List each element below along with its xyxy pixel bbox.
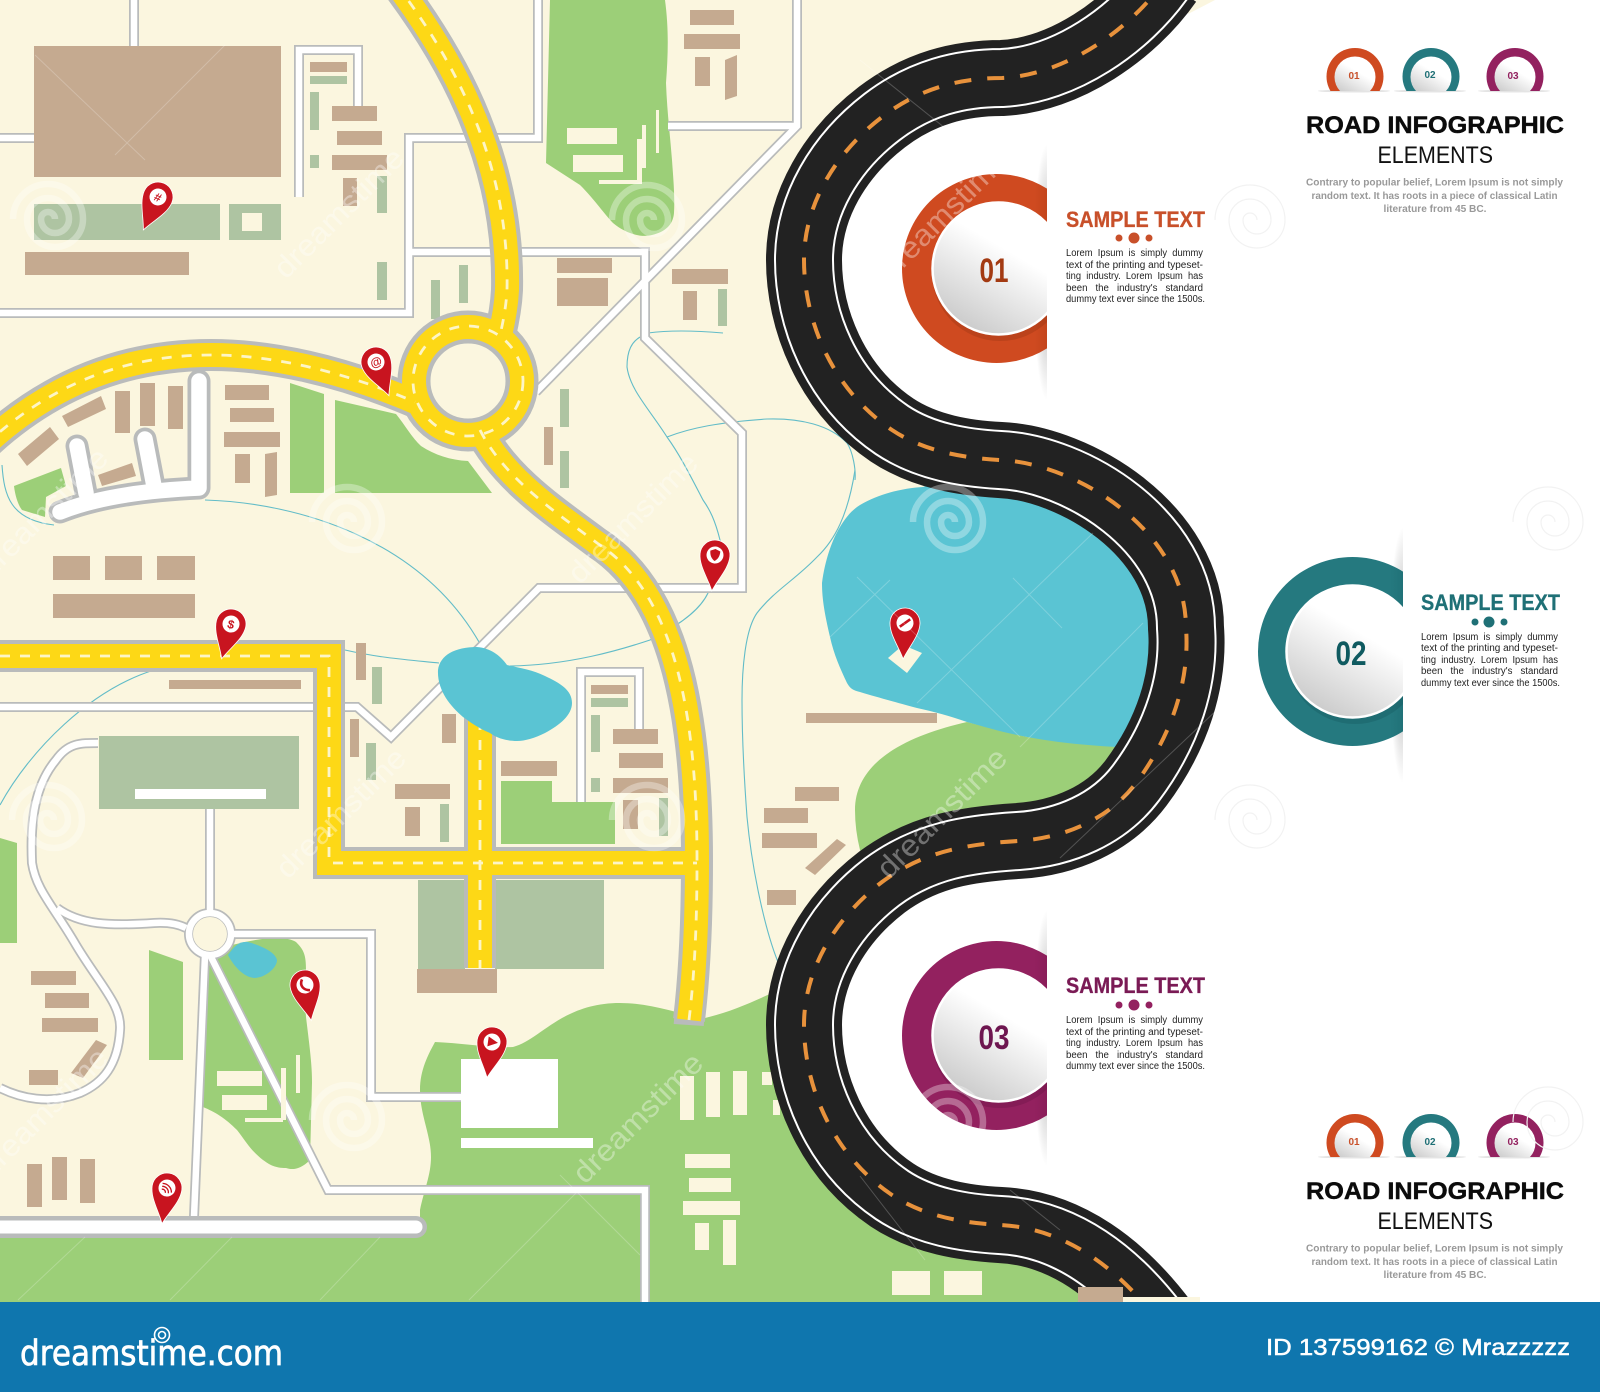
disc shadow (932, 972, 1068, 1108)
rivers (0, 331, 855, 962)
park: lower centre (203, 938, 312, 1169)
lake: park pond (228, 942, 277, 978)
small roundabout centre (193, 917, 227, 951)
body text: ting industry. Lorem Ipsum has (1066, 1038, 1203, 1049)
dots (1472, 616, 1508, 628)
map: land area west of the road (0, 0, 1215, 1330)
pin: shield (697, 539, 731, 592)
heading: SAMPLE TEXT (1066, 973, 1206, 998)
watermark overlay: dreamstime (562, 447, 705, 590)
pin: phone (288, 968, 326, 1023)
mini step icons: 02 (1424, 1137, 1436, 1148)
body text (1421, 632, 1560, 689)
body text: dummy text ever since the 1500s. (1421, 678, 1560, 689)
number: 01 (980, 252, 1008, 290)
footer bar (0, 1302, 1600, 1392)
description: random text. It has roots in a piece of classical Latin (1312, 1257, 1558, 1268)
mini step icons (1318, 48, 1550, 105)
ring (1258, 557, 1403, 746)
ring (902, 174, 1047, 363)
highway centre dashes (0, 0, 697, 1020)
body text: Lorem Ipsum is simply dummy (1066, 248, 1203, 259)
watermark overlay: dreamstime (567, 1047, 710, 1190)
description: Contrary to popular belief, Lorem Ipsum is not simply (1306, 178, 1563, 188)
wide street: bottom (0, 1216, 416, 1238)
pin: play (472, 1025, 509, 1080)
buildings (18, 10, 982, 1295)
pin: dollar: $ (226, 617, 236, 632)
disc shadow (933, 284, 1047, 341)
body text: ting industry. Lorem Ipsum has (1421, 655, 1558, 666)
parks (0, 0, 1140, 1302)
disc (931, 201, 1047, 336)
body text: been the industry's standard (1066, 283, 1203, 294)
land base (0, 0, 1094, 1217)
ring (902, 941, 1091, 1130)
description: literature from 45 BC. (1384, 204, 1487, 215)
map pins (130, 177, 921, 1226)
mini step icons (1318, 1114, 1550, 1171)
description: literature from 45 BC. (1384, 1270, 1487, 1281)
winding asphalt road (804, 0, 1187, 1330)
highway: yellow roads and roundabout (0, 0, 704, 1022)
heading: SAMPLE TEXT (1421, 590, 1561, 615)
body text: been the industry's standard (1421, 666, 1558, 677)
road edge lines (804, 0, 1187, 1330)
title: ROAD INFOGRAPHIC (1306, 112, 1564, 139)
mini step icons: 02 (1424, 70, 1436, 81)
mini step icons: 01 (1348, 71, 1360, 82)
lake: small (438, 647, 572, 741)
description: Contrary to popular belief, Lorem Ipsum is not simply (1306, 1244, 1563, 1254)
disc (1286, 586, 1418, 718)
highway surface (0, 0, 697, 1020)
pin: wrench (888, 607, 921, 660)
wide street: upper left (60, 381, 199, 512)
road surface (804, 0, 1187, 1330)
subtitle: ELEMENTS (1378, 1208, 1493, 1235)
body text: text of the printing and typeset- (1421, 643, 1558, 654)
body text (1066, 248, 1205, 305)
body text: text of the printing and typeset- (1066, 260, 1203, 271)
footer logo: dreamstime.com (20, 1334, 283, 1374)
mini step icons: 03 (1507, 1137, 1519, 1148)
grey-green blocks (34, 76, 727, 969)
fold shadow (1038, 156, 1047, 388)
watermark overlay: dreamstime (270, 742, 413, 885)
park: lake shore (855, 722, 1115, 850)
image id: ID 137599162 © Mrazzzzz (1266, 1334, 1570, 1360)
panel: title block top (1306, 48, 1564, 215)
body text: been the industry's standard (1066, 1050, 1203, 1061)
description: random text. It has roots in a piece of classical Latin (1312, 191, 1558, 202)
number: 02 (1336, 635, 1366, 673)
watermark overlay: dreamstime (872, 144, 1015, 287)
pin: at sign: @ (368, 353, 384, 371)
description (1306, 178, 1563, 215)
lake: large (822, 486, 1149, 747)
pin: dollar (207, 606, 249, 663)
description (1306, 1244, 1563, 1281)
fold shadow (1033, 910, 1061, 1166)
body text: text of the printing and typeset- (1066, 1027, 1203, 1038)
pin: hash (130, 177, 178, 236)
park strips (0, 383, 615, 1060)
disc shadow (1292, 682, 1403, 724)
thin streets (0, 0, 797, 1302)
watermark overlay: dreamstime (268, 142, 411, 285)
pin: hash: # (152, 190, 164, 205)
pin: wifi (147, 1171, 184, 1226)
heading: SAMPLE TEXT (1066, 207, 1206, 232)
panel: step 02 (1258, 527, 1561, 783)
body text: Lorem Ipsum is simply dummy (1421, 632, 1558, 643)
body text: dummy text ever since the 1500s. (1066, 294, 1205, 305)
title: ROAD INFOGRAPHIC (1306, 1178, 1564, 1205)
subtitle: ELEMENTS (1378, 142, 1493, 169)
pin: at sign (357, 343, 403, 401)
mini step icons: 01 (1348, 1137, 1360, 1148)
number: 03 (978, 1019, 1010, 1057)
disc (932, 970, 1064, 1102)
road centre dashes (804, 0, 1187, 1330)
logo spiral (154, 1328, 170, 1342)
panel: step 03 (902, 910, 1206, 1166)
panel: title block bottom (1306, 1114, 1564, 1281)
fold shadow (1394, 539, 1403, 770)
panel: step 01 (902, 144, 1206, 400)
cream blocks (217, 110, 982, 1295)
highway casing (0, 0, 704, 1022)
body text: Lorem Ipsum is simply dummy (1066, 1015, 1203, 1026)
body text: dummy text ever since the 1500s. (1066, 1061, 1205, 1072)
road patch at map edge (1078, 1287, 1200, 1302)
park: top centre (546, 0, 674, 236)
body text: ting industry. Lorem Ipsum has (1066, 271, 1203, 282)
body text (1066, 1015, 1205, 1072)
white buildings (135, 789, 593, 1148)
dots (1116, 1000, 1152, 1010)
park: bottom (0, 993, 1130, 1302)
dots (1116, 232, 1152, 244)
watermark overlay: dreamstime (871, 742, 1014, 885)
land corner patch (1188, 0, 1215, 14)
tan buildings (18, 10, 937, 1207)
islet (888, 648, 922, 673)
mini step icons: 03 (1507, 71, 1519, 82)
